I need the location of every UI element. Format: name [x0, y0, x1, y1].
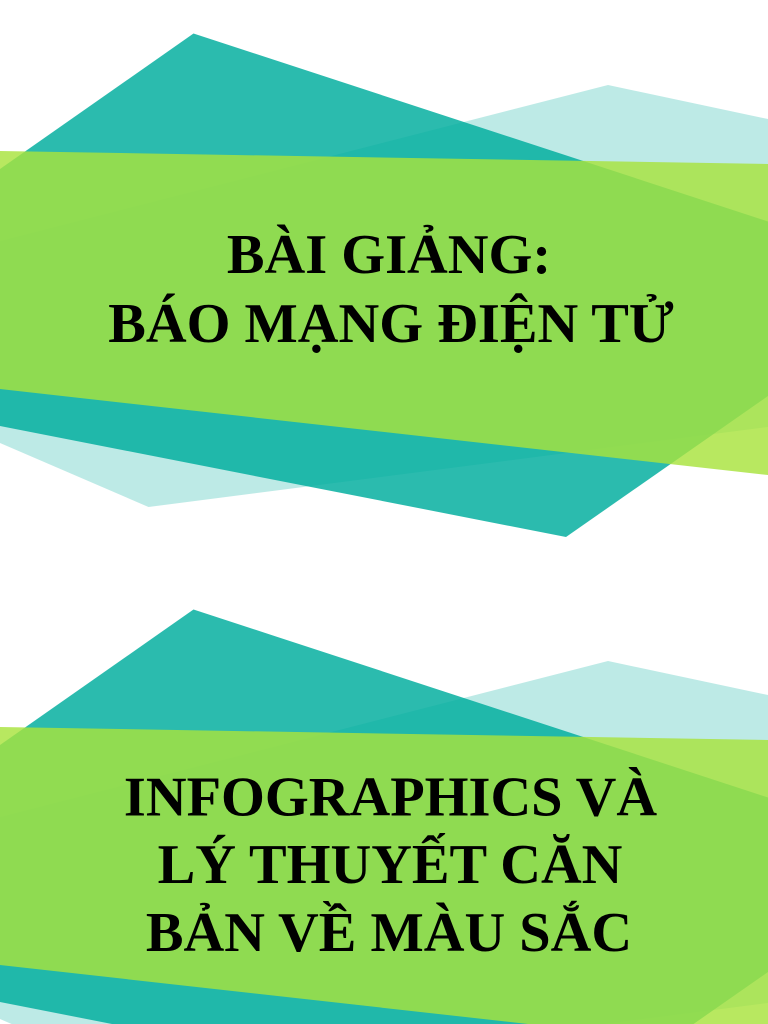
slide 1 heading: BÁO MẠNG ĐIỆN TỬ	[108, 292, 674, 355]
slide 2 pale teal background shape	[0, 661, 768, 1024]
slide 2 teal angular shape	[0, 610, 768, 1024]
slide 2 heading: BẢN VỀ MÀU SẮC	[146, 900, 632, 964]
slide 1: lecture title	[0, 34, 768, 537]
slide 1 pale teal background shape	[0, 85, 768, 507]
slide 2 heading: INFOGRAPHICS VÀ	[124, 766, 657, 828]
slide 1 green banner	[0, 151, 768, 475]
slide 1 teal angular shape	[0, 34, 768, 537]
slide 2: infographics and colour theory	[0, 610, 768, 1024]
slide 1 heading: BÀI GIẢNG:	[227, 224, 551, 286]
slide 2 heading: LÝ THUYẾT CĂN	[158, 832, 622, 896]
slide 2 green banner	[0, 727, 768, 1024]
